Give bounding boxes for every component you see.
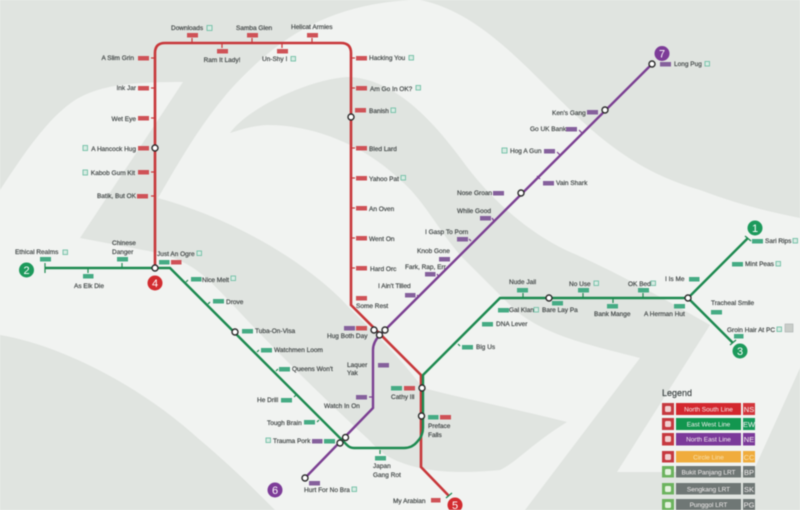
station: A Slim Grin [101, 55, 154, 62]
station: A Herman Hut: A Herman Hut [644, 311, 685, 318]
station: Go UK Bank [530, 126, 582, 133]
station: Bank Mange [594, 299, 631, 318]
station: My Arabian [393, 498, 440, 505]
station: As Elk Die: As Elk Die [74, 283, 104, 290]
station: Went On: Went On [369, 236, 395, 243]
legend row: Punggol LRT [662, 499, 755, 510]
line terminus badge 2: 2 [23, 265, 30, 277]
station: Groin Hair At PC: Groin Hair At PC [727, 327, 775, 334]
line terminus badge 1: 1 [752, 223, 758, 235]
station: Nude Jail: Nude Jail [509, 279, 537, 286]
legend [662, 388, 756, 510]
legend row: East West Line: East West Line [687, 422, 731, 428]
station: I Is Me [665, 276, 700, 283]
station: Laquer Yak: Yak [347, 370, 358, 377]
station: Preface Falls [428, 415, 451, 439]
station: Just An Ogre [157, 251, 202, 264]
station: No Use: No Use [569, 281, 591, 288]
station: Fark, Rap, Err: Fark, Rap, Err [405, 264, 447, 271]
station: Tuba-On-Visa: Tuba-On-Visa [255, 328, 295, 335]
station: Trauma Pork: Trauma Pork [273, 438, 311, 445]
station: Knob Gone: Knob Gone [417, 248, 450, 255]
station: Nude Jail [509, 279, 537, 297]
station: Cathy Ill: Cathy Ill [391, 394, 415, 401]
line terminus badge 7: 7 [659, 48, 665, 60]
station: Vain Shark: Vain Shark [556, 180, 588, 187]
station: DNA Lever [482, 321, 528, 328]
station: An Oven [352, 206, 395, 213]
station: Samba Glen [236, 25, 273, 42]
station: Japan Gang Rot: Gang Rot [373, 472, 401, 479]
legend row: North South Line [662, 403, 755, 415]
station: Ethical Realms [15, 249, 68, 262]
station: Banish: Banish [369, 108, 389, 115]
station: Bled Lard: Bled Lard [369, 146, 397, 153]
station: Batik, But OK: Batik, But OK [97, 193, 137, 200]
interchange markers [152, 61, 691, 481]
station: Yahoo Pat: Yahoo Pat [369, 176, 399, 183]
station: Ink Jar: Ink Jar [116, 85, 137, 92]
legend row: Bukit Panjang LRT [662, 466, 755, 478]
station: Hog A Gun: Hog A Gun [510, 148, 542, 155]
purple north east line [305, 64, 652, 478]
station: He Drill [257, 395, 296, 404]
station: Hurt For No Bra: Hurt For No Bra [304, 487, 350, 494]
station: Am Go In OK? [352, 86, 420, 93]
red north south line [155, 43, 449, 496]
station: Watch In On [324, 395, 372, 410]
station: Wet Eye [112, 116, 154, 123]
station: Tracheal Smile: Tracheal Smile [711, 300, 754, 307]
station: Chinese Danger: Danger [112, 249, 134, 256]
station: OK Bed: OK Bed [628, 281, 651, 288]
legend row: Bukit Panjang LRT: Bukit Panjang LRT [681, 470, 736, 476]
station: As Elk Die [74, 269, 104, 290]
station: I Gasp To Porn [425, 229, 471, 242]
station: Drove: Drove [226, 299, 244, 306]
station: I Ain't Tilled [378, 283, 419, 298]
station: My Arabian: My Arabian [393, 498, 426, 505]
station: No Use [569, 281, 598, 297]
station: Mint Peas: Mint Peas [745, 261, 775, 268]
station: I Ain't Tilled: I Ain't Tilled [378, 283, 411, 290]
line terminus badge 3 [732, 344, 748, 358]
station: Long Pug [660, 61, 710, 68]
line terminus badge 1 [748, 220, 762, 236]
line terminus badge 6 [268, 482, 282, 498]
station: Hug Both Day: Hug Both Day [327, 333, 368, 340]
station: Preface Falls: Falls [428, 432, 442, 439]
station: Sari Rips: Sari Rips [765, 238, 792, 245]
station: Gal Klan: Gal Klan [509, 307, 534, 314]
station: Tracheal Smile [711, 300, 754, 314]
line terminus badge 5 [448, 498, 462, 510]
station: Helicat Armies [291, 24, 333, 42]
station: Gal Klan [498, 307, 538, 314]
station: An Oven: An Oven [369, 206, 395, 213]
station: Wet Eye: Wet Eye [112, 116, 136, 123]
station: Hurt For No Bra [304, 481, 356, 494]
station: Queens Won't: Queens Won't [292, 366, 333, 373]
station: Nice Melt: Nice Melt [202, 277, 229, 284]
station: While Good [457, 208, 494, 221]
station: Knob Gone [417, 248, 450, 262]
station: Watch In On: Watch In On [324, 403, 360, 410]
station: Bank Mange: Bank Mange [594, 311, 631, 318]
station: Japan Gang Rot: Japan [373, 463, 391, 470]
line terminus badge 4: 4 [152, 278, 158, 290]
station: Ethical Realms: Ethical Realms [15, 249, 59, 256]
station: Sari Rips [752, 238, 798, 245]
legend row: Punggol LRT: Punggol LRT [690, 502, 727, 509]
station: Fark, Rap, Err [405, 264, 447, 277]
line terminus badge 7 [654, 46, 670, 61]
station: DNA Lever: DNA Lever [496, 321, 528, 328]
station: Japan Gang Rot [373, 450, 401, 479]
station: Hug Both Day [327, 326, 368, 340]
station: Hog A Gun [502, 148, 560, 155]
station: A Herman Hut [644, 304, 685, 318]
legend row: North East Line: North East Line [686, 436, 731, 444]
station: Un-Shy I: Un-Shy I [262, 56, 287, 63]
legend row: Circle Line [662, 451, 755, 462]
station: Yahoo Pat [352, 176, 406, 183]
station: Mint Peas [732, 261, 780, 268]
station: Some Rest [356, 296, 388, 310]
station: Bare Lay Pa [542, 301, 578, 314]
station: Hard Orc: Hard Orc [370, 266, 397, 273]
station: Long Pug: Long Pug [674, 61, 702, 68]
legend row: East West Line [662, 418, 756, 430]
station: Drove [208, 299, 244, 306]
station: Helicat Armies: Helicat Armies [291, 24, 333, 31]
station: Kabob Gum Kit: Kabob Gum Kit [91, 170, 135, 177]
station: Chinese Danger: Chinese [112, 240, 136, 247]
station: He Drill: He Drill [257, 397, 279, 404]
legend row: North East Line [662, 433, 755, 446]
station: Chinese Danger [112, 240, 136, 267]
station: Watchmen Loom: Watchmen Loom [274, 347, 323, 354]
line terminus badge 3: 3 [737, 346, 743, 358]
station: Un-Shy I [262, 44, 296, 63]
legend row: Sengkang LRT: Sengkang LRT [687, 486, 730, 494]
station: Went On [352, 236, 395, 243]
station: Batik, But OK [97, 193, 154, 200]
station: Trauma Pork [266, 438, 335, 445]
green east west line [45, 238, 748, 448]
station: Downloads [171, 25, 212, 42]
station: Hacking You: Hacking You [369, 55, 406, 62]
legend row: Circle Line: CC [744, 453, 755, 462]
station: Bled Lard [352, 146, 397, 153]
line terminus badge 2 [19, 262, 34, 278]
station: Ram It Lady! [204, 44, 241, 64]
legend row: Sengkang LRT: SK [744, 485, 754, 494]
station: Just An Ogre: Just An Ogre [157, 251, 195, 258]
station: A Hancock Hug [83, 146, 149, 153]
station: Am Go In OK?: Am Go In OK? [370, 86, 413, 93]
station: Laquer Yak [347, 362, 389, 377]
legend title: Legend [662, 388, 692, 398]
station: Hard Orc [352, 266, 397, 273]
station: Ken's Gang: Ken's Gang [552, 110, 586, 117]
station: Tough Brain [267, 420, 319, 427]
legend row: Punggol LRT: PG [744, 500, 755, 510]
station: Big Us: Big Us [476, 344, 496, 351]
station: Ram It Lady!: Ram It Lady! [204, 57, 241, 64]
station: Big Us [458, 344, 496, 351]
station: Nose Groan: Nose Groan [457, 190, 492, 197]
station: Samba Glen: Samba Glen [236, 25, 273, 32]
station: I Gasp To Porn: I Gasp To Porn [425, 229, 469, 236]
station: Go UK Bank: Go UK Bank [530, 126, 567, 133]
station: Kabob Gum Kit [83, 170, 154, 177]
station: Downloads: Downloads [171, 25, 204, 32]
station: Cathy Ill [391, 386, 415, 401]
station: While Good: While Good [457, 208, 491, 215]
station: Nice Melt [186, 276, 236, 284]
legend row: North South Line: North South Line [684, 406, 733, 414]
station: Ink Jar [116, 85, 154, 92]
legend row: North South Line: NS [744, 405, 754, 414]
station: Laquer Yak: Laquer [347, 362, 368, 369]
legend row: Bukit Panjang LRT: BP [744, 468, 754, 477]
line terminus badge 4 [148, 276, 162, 290]
station: Tough Brain: Tough Brain [267, 420, 302, 427]
legend row: Sengkang LRT [662, 483, 755, 494]
station: Preface Falls: Preface [428, 423, 451, 430]
station: Vain Shark [537, 176, 588, 187]
legend row: North East Line: NE [744, 435, 754, 444]
legend row: Circle Line: Circle Line [693, 454, 724, 462]
station: I Is Me: I Is Me [665, 276, 685, 283]
legend row: East West Line: EW [743, 420, 756, 429]
station: Banish [355, 108, 396, 115]
station: Bare Lay Pa: Bare Lay Pa [542, 307, 578, 314]
station: Groin Hair At PC [727, 324, 793, 338]
station: Hacking You [352, 55, 414, 62]
station: A Slim Grin: A Slim Grin [101, 55, 134, 62]
line terminus badge 6: 6 [272, 485, 278, 497]
station: A Hancock Hug: A Hancock Hug [91, 146, 136, 153]
station: Some Rest: Some Rest [356, 303, 388, 310]
end caps [45, 236, 751, 498]
station: OK Bed [628, 281, 656, 297]
